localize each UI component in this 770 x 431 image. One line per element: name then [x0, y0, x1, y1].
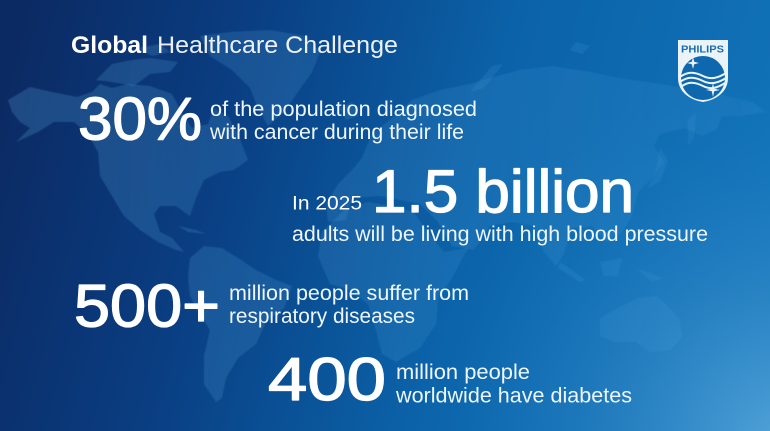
stat: 30% cancer: 30%: [78, 86, 202, 152]
stat: 1.5 billion high blood pressure: In 2025: [292, 192, 362, 214]
logo: philips shield: PHILIPS: [681, 44, 724, 56]
stat: 400 diabetes: 400: [268, 346, 386, 413]
stat: 30% cancer: with cancer during their life: [209, 120, 464, 144]
map: islands: [178, 42, 696, 282]
map: africa: [318, 202, 468, 362]
stat: 400 diabetes: million people: [396, 360, 530, 384]
stat: 1.5 billion high blood pressure: [292, 158, 708, 246]
stat: 500+ respiratory: respiratory diseases: [229, 304, 415, 328]
title: Healthcare Challenge: [157, 32, 398, 59]
stat: 1.5 billion high blood pressure: 1.5 billion: [372, 158, 634, 225]
title: Global: [71, 32, 148, 59]
map: south america: [188, 246, 292, 402]
stat: 30% cancer: of the population diagnosed: [210, 97, 477, 121]
map: arctic islands: [96, 44, 178, 86]
stat: 1.5 billion high blood pressure: adults will be living with high blood pressure: [292, 222, 708, 246]
stat: 30% cancer: [78, 86, 477, 152]
stat: 400 diabetes: worldwide have diabetes: [395, 384, 632, 408]
stat: 500+ respiratory: [74, 272, 469, 340]
map: north america: [8, 84, 248, 252]
stat: 500+ respiratory: million people suffer from: [229, 281, 469, 305]
stat: 500+ respiratory: 500+: [74, 272, 220, 340]
stat: 400 diabetes: [268, 346, 632, 413]
map: greenland: [200, 30, 320, 126]
map: eurasia: [326, 66, 766, 266]
logo: philips shield: [678, 40, 728, 102]
map: australia: [600, 296, 682, 352]
